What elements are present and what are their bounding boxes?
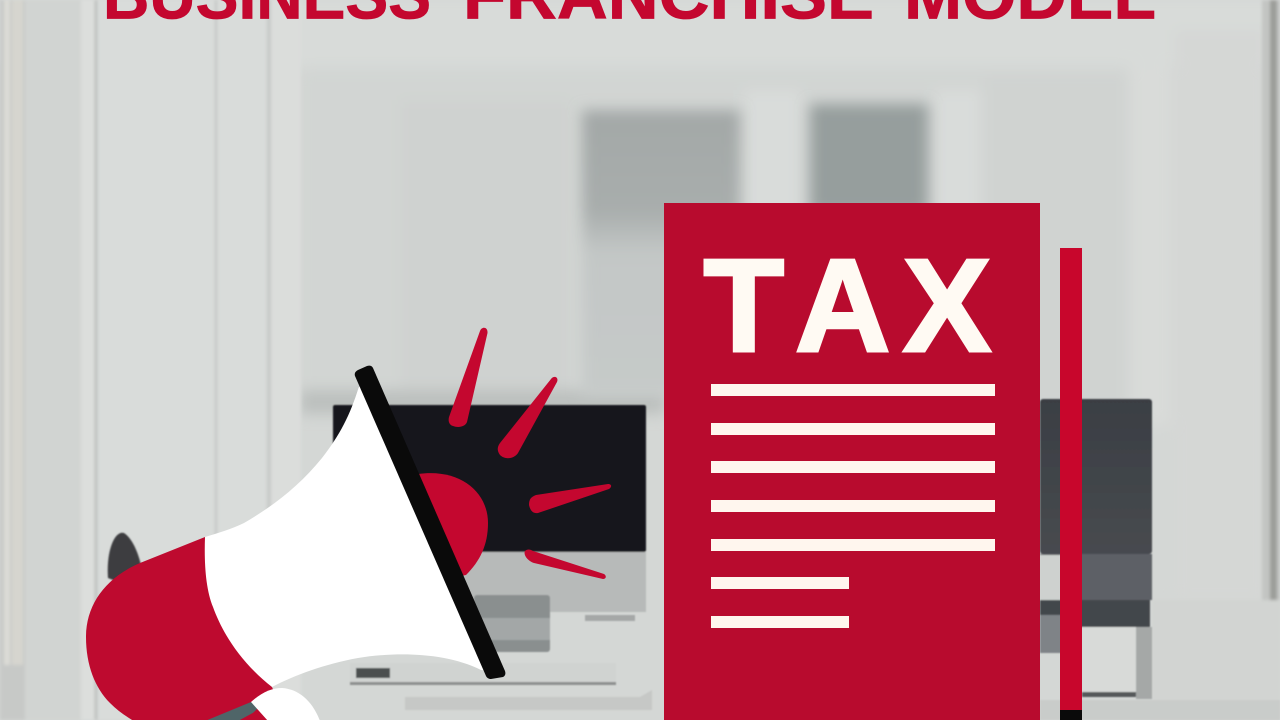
megaphone white horn (205, 378, 495, 687)
megaphone black rim (355, 366, 505, 679)
background: windows (582, 104, 928, 395)
background: chair (108, 533, 141, 582)
megaphone red rear (86, 537, 290, 720)
megaphone red dome (400, 473, 488, 580)
title (103, 0, 1156, 34)
background: left monitor (333, 405, 652, 710)
background: right monitor (1040, 399, 1280, 720)
megaphone sound rays (449, 328, 611, 579)
document spine (1060, 248, 1082, 720)
megaphone handle (205, 688, 320, 720)
document text lines (711, 384, 995, 628)
document heading: TAX: TAX (704, 232, 991, 379)
icon: megaphone (86, 328, 611, 720)
document page (664, 203, 1040, 720)
icon: tax document (664, 203, 1082, 720)
